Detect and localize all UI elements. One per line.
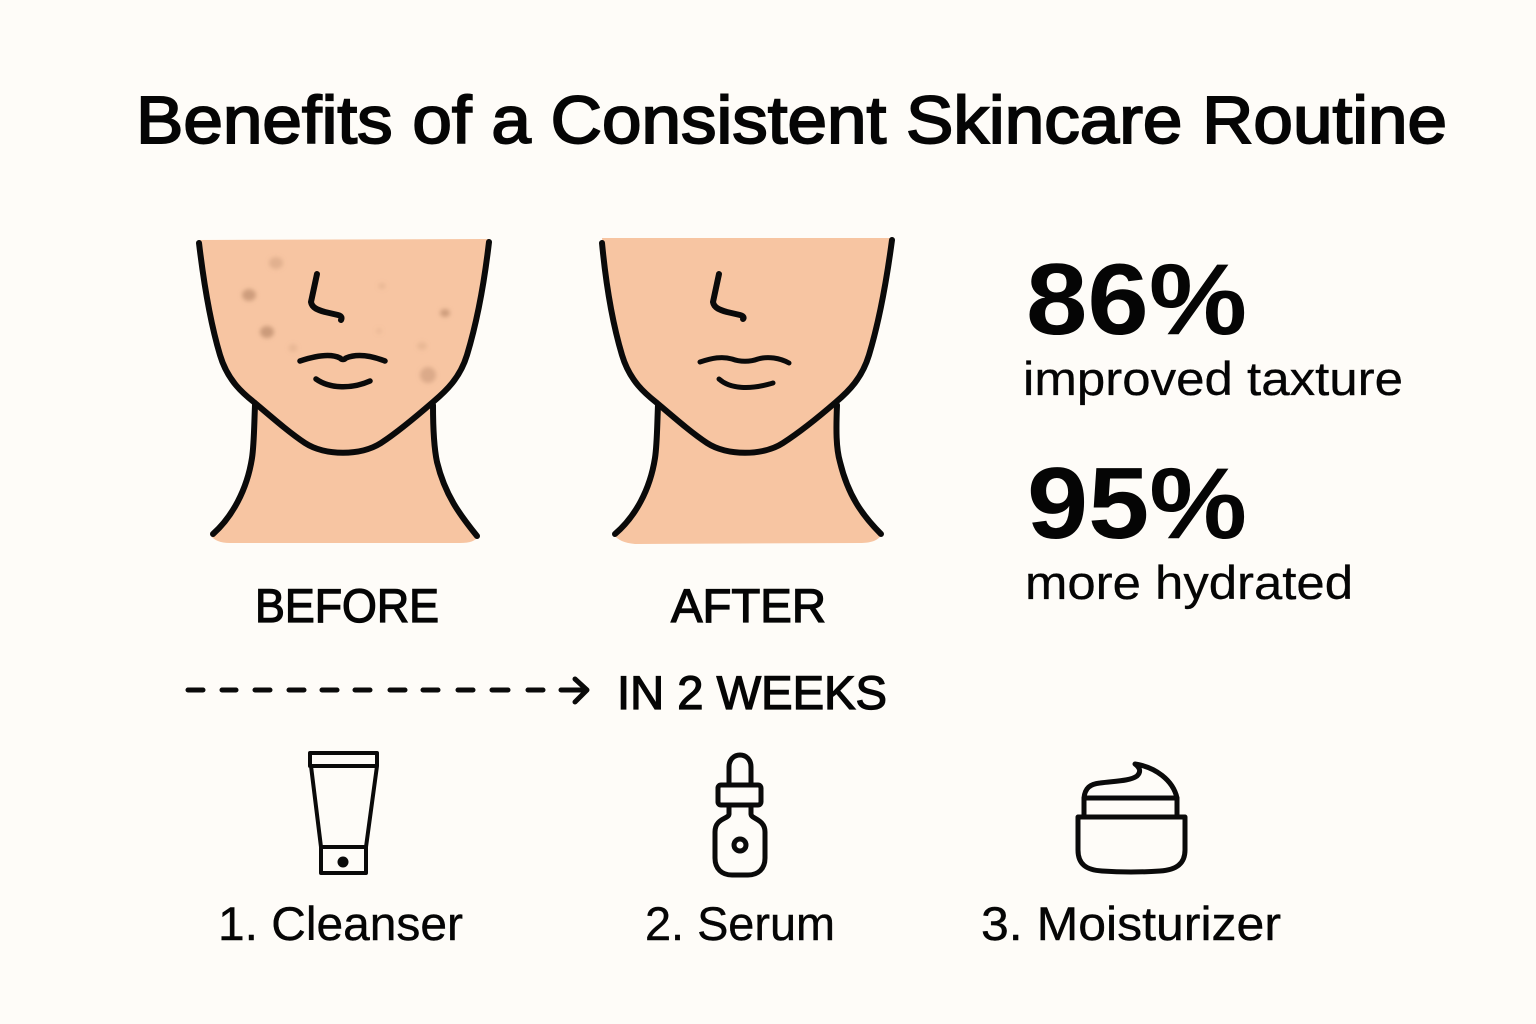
stat: 86% improved texture: 86%: [1026, 244, 1247, 356]
stat: 95% more hydrated: more hydrated: [1025, 556, 1353, 609]
arrow: dashed timeline: [188, 679, 587, 702]
step label: cleanser: 1. Cleanser: [218, 897, 463, 950]
step label: moisturizer: 3. Moisturizer: [981, 897, 1281, 950]
stat: 95% more hydrated: [1025, 448, 1353, 609]
skin fill: before: [199, 239, 489, 543]
step label: serum: 2. Serum: [645, 897, 835, 950]
stat: 86% improved texture: [1023, 244, 1403, 405]
stat: 95% more hydrated: 95%: [1027, 448, 1247, 560]
lips: before: [300, 355, 385, 387]
face outline: after: [602, 240, 892, 453]
neck outline: after: [615, 405, 881, 534]
nose: before: [311, 274, 342, 320]
before label: BEFORE: [255, 579, 439, 632]
icon: serum dropper: [715, 755, 765, 875]
in 2 weeks label: IN 2 WEEKS: [617, 666, 887, 719]
panel: before face: [199, 239, 489, 543]
nose: after: [713, 274, 744, 319]
panel: after face: [602, 238, 892, 544]
blemishes: [242, 257, 450, 383]
icon: cleanser tube: [310, 753, 377, 873]
neck outline: before: [213, 405, 477, 536]
title: Benefits of a Consistent Skincare Routine: [136, 83, 1447, 158]
skin fill: after: [602, 238, 892, 544]
face outline: before: [199, 242, 489, 453]
after label: AFTER: [671, 579, 826, 632]
icon: moisturizer jar: [1078, 764, 1185, 872]
lips: after: [700, 358, 789, 388]
stat: 86% improved texture: improved taxture: [1023, 352, 1403, 405]
